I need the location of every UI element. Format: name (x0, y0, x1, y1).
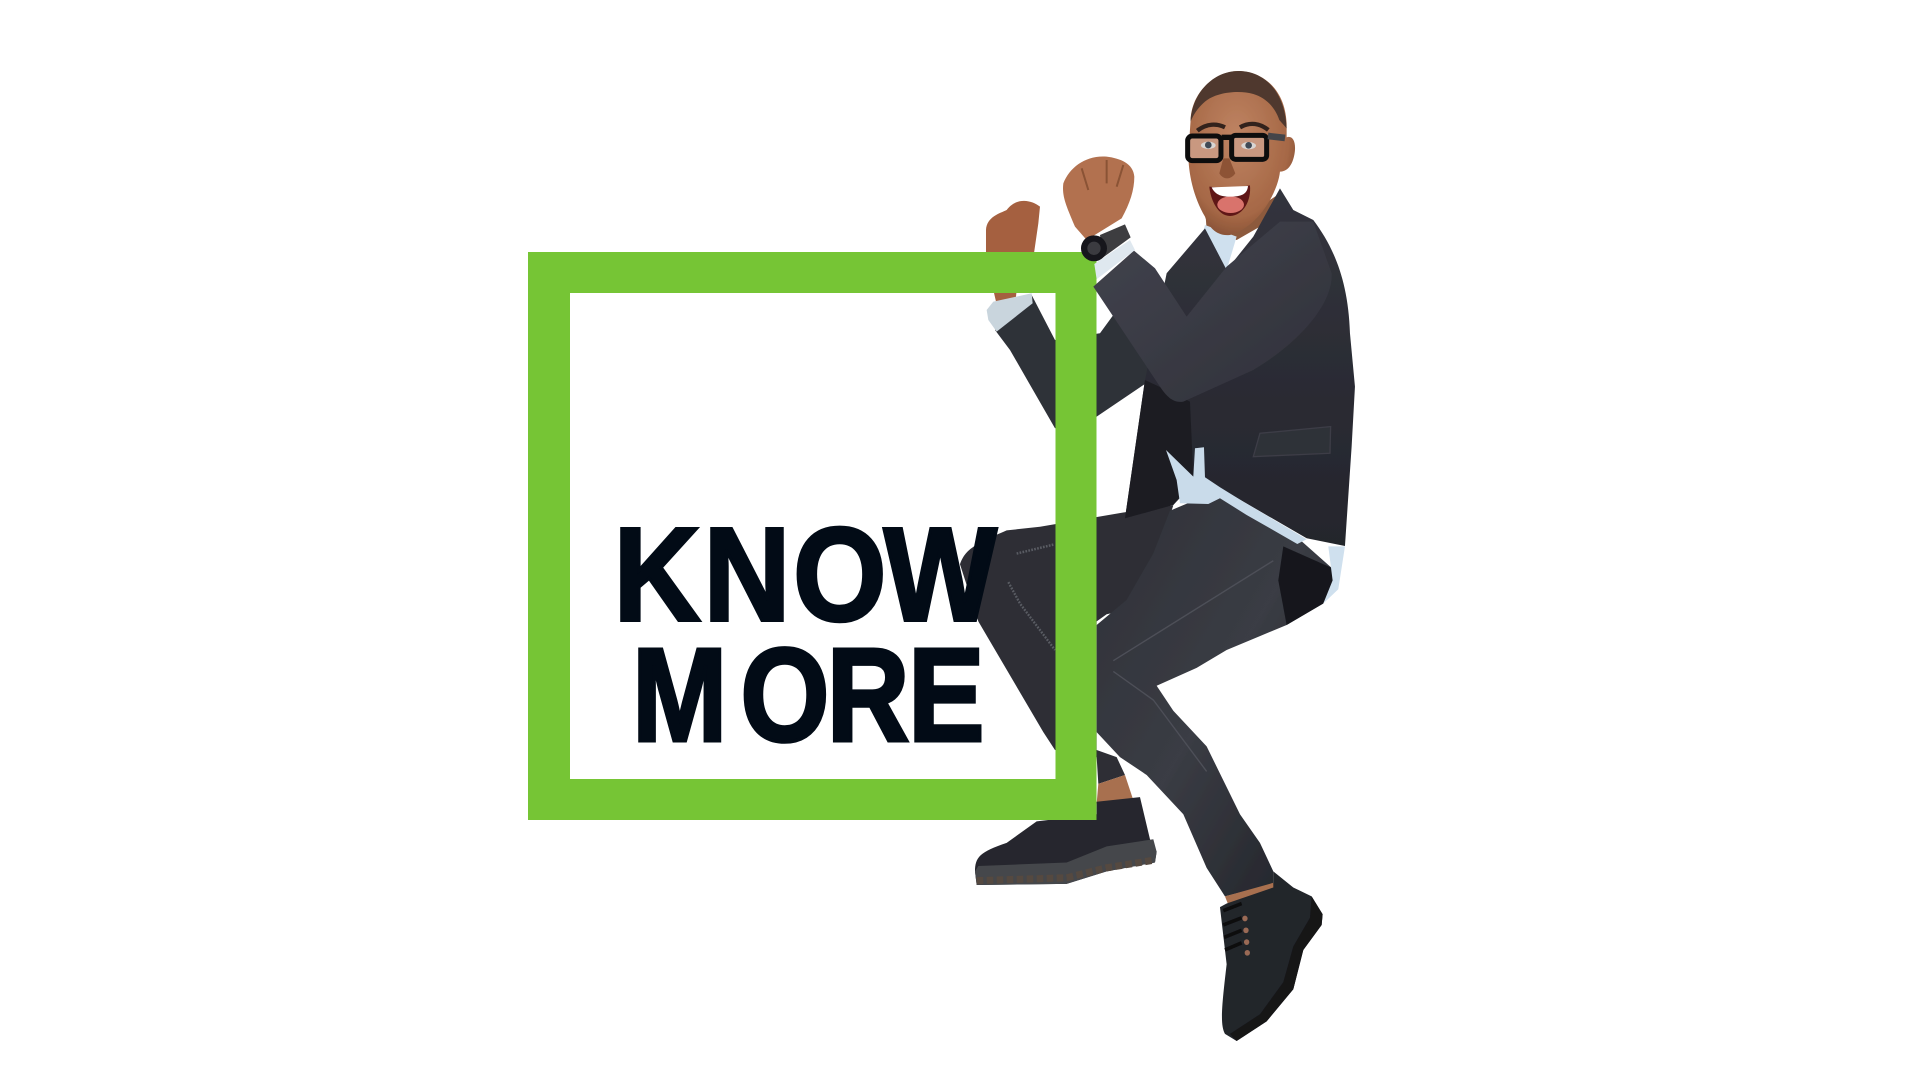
back pocket and belt area (1278, 546, 1333, 625)
jacket torso (1125, 188, 1355, 546)
back shoe (975, 797, 1157, 885)
green square frame (528, 252, 1096, 820)
lower shirt (1166, 447, 1307, 544)
word: MORE: MORE (632, 622, 984, 770)
shirt front (1187, 225, 1237, 317)
figure: torso, back arm and head (986, 71, 1355, 546)
jeans highlight and seam (1113, 561, 1273, 771)
front sleeve (1093, 222, 1332, 402)
open mouth (1209, 185, 1250, 216)
headline: KNOW MORE (614, 499, 997, 770)
back ankle (1097, 775, 1133, 804)
figure: legs and shoes behind the frame (960, 491, 1345, 1041)
wrist watch (1081, 224, 1131, 261)
figure: front arm, fist and watch in front of the frame (1063, 156, 1332, 402)
fist (1063, 156, 1134, 240)
back leg jeans (960, 505, 1173, 784)
glasses (1188, 135, 1285, 161)
front cuff (1094, 240, 1135, 279)
neck (1205, 193, 1280, 240)
back hand (986, 201, 1040, 312)
head (1188, 71, 1295, 235)
back arm sleeve (995, 295, 1153, 428)
back cuff (987, 293, 1033, 332)
back leg stitching (1008, 545, 1055, 650)
dark underarm shadow (1125, 380, 1193, 518)
front ankle (1225, 883, 1275, 909)
hair (1191, 71, 1287, 128)
word: KNOW: KNOW (614, 499, 997, 649)
front leg jeans (1097, 491, 1333, 896)
shirt tail at hip (1323, 546, 1345, 604)
jacket pocket (1253, 427, 1331, 457)
front shoe (1220, 871, 1323, 1041)
